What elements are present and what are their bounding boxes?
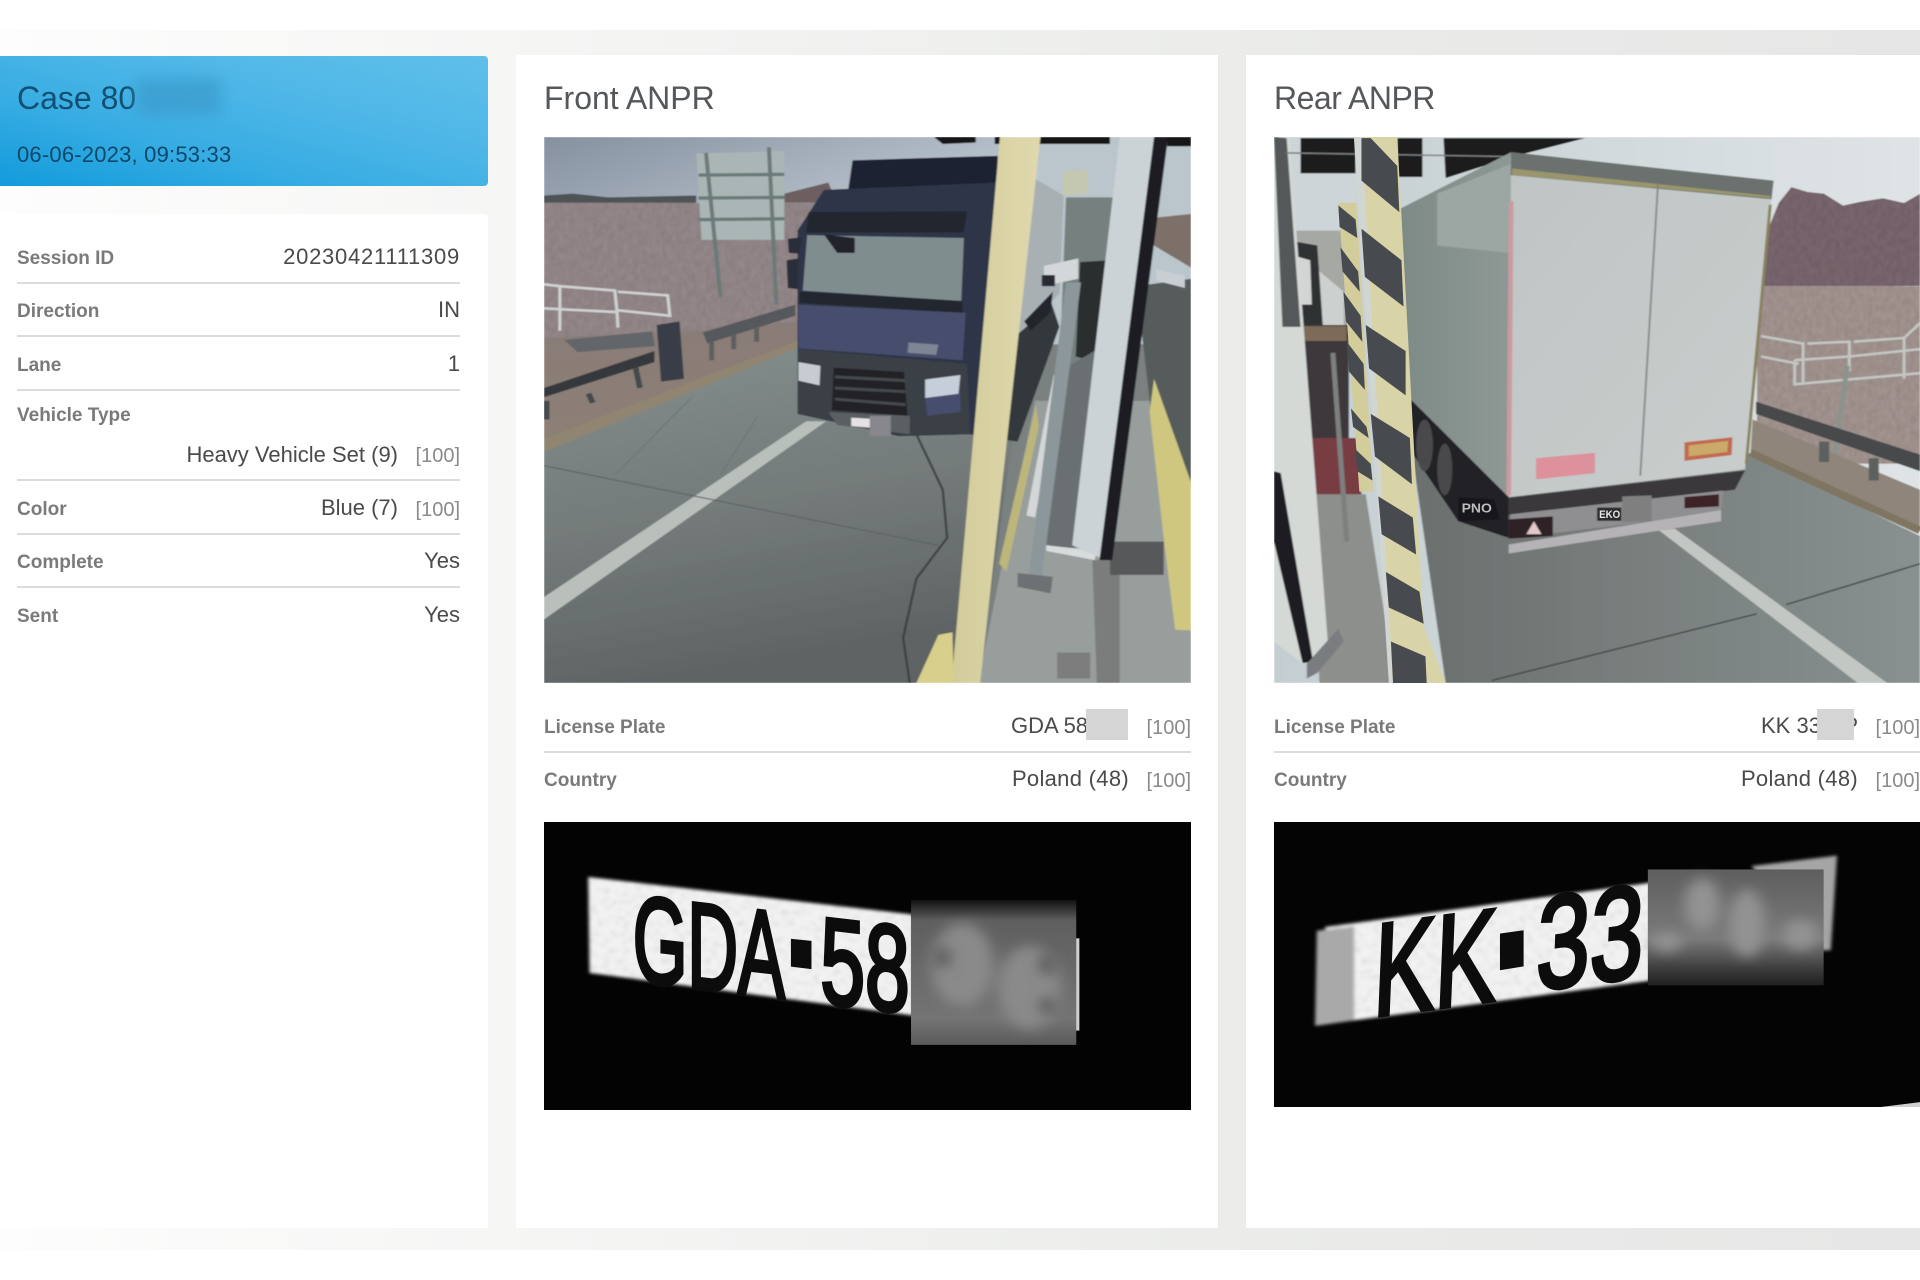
yellow pillar	[952, 137, 1040, 683]
row: vehicle type	[17, 389, 460, 481]
left background	[1286, 138, 1357, 234]
row: vehicle type: [100]	[416, 445, 460, 467]
white booth	[1026, 371, 1061, 518]
panel: case header	[0, 56, 488, 186]
image: front plate crop: 58	[820, 892, 910, 1039]
text on truck: PNO	[1462, 502, 1492, 516]
white column	[1072, 137, 1155, 558]
text on tail panel: EKO	[1599, 508, 1620, 521]
trailer rear face	[1509, 175, 1772, 497]
small striped pillar	[1338, 203, 1373, 492]
row: sent	[17, 602, 460, 627]
row: session id: 20230421111309	[283, 244, 460, 269]
row: front license plate: [100]	[1147, 717, 1191, 739]
gate interior	[1059, 197, 1114, 375]
row: rear license plate: P	[1843, 713, 1858, 738]
redacted case digits	[136, 78, 221, 116]
row: front license plate: GDA 58	[1011, 713, 1088, 738]
redaction: rear plate text	[1817, 709, 1854, 740]
yellow rails right	[1150, 379, 1191, 630]
heading: front ANPR: Front ANPR	[544, 80, 715, 116]
row: direction	[17, 285, 460, 337]
row: complete	[17, 536, 460, 588]
row: lane: 1	[448, 351, 460, 376]
row: vehicle type: Vehicle Type	[17, 405, 131, 426]
yellow rail left of booth	[999, 405, 1039, 571]
under-chassis	[1409, 397, 1509, 538]
tail section	[1509, 471, 1745, 515]
image: rear plate crop: KK	[1371, 880, 1500, 1045]
case number: Case 80	[17, 80, 136, 116]
overhead bars	[934, 137, 1191, 146]
row: rear country	[1274, 766, 1920, 792]
row: color	[17, 483, 460, 535]
row: rear country: Poland (48)	[1741, 766, 1858, 791]
row: session id: Session ID	[17, 248, 114, 269]
sign	[696, 151, 784, 240]
overhead panels	[1300, 138, 1585, 178]
row: color: [100]	[416, 499, 460, 521]
photo: truck front at toll gate	[544, 137, 1191, 683]
right side concrete	[978, 401, 1191, 683]
photo: truck rear at toll gate	[1274, 137, 1920, 683]
row: front country: [100]	[1147, 770, 1191, 792]
row: direction: Direction	[17, 301, 99, 322]
row: rear license plate: KK 33	[1761, 713, 1821, 738]
row: session id	[17, 232, 460, 284]
row: rear license plate	[1274, 701, 1920, 753]
trailer side	[1399, 152, 1511, 498]
road	[1412, 453, 1920, 683]
panel: rear ANPR	[1246, 55, 1920, 1228]
row: front license plate: License Plate	[544, 717, 665, 738]
field	[1757, 286, 1920, 464]
road markings	[544, 421, 826, 619]
row: lane: Lane	[17, 355, 61, 376]
row: front country: Country	[544, 770, 617, 791]
image: rear plate crop: 33	[1534, 856, 1647, 1018]
image: front plate crop: GDA	[633, 870, 785, 1025]
row: color: Blue (7)	[321, 495, 398, 520]
row: sent: Sent	[17, 606, 58, 627]
row: direction: IN	[438, 297, 460, 322]
truck	[848, 156, 998, 190]
row: vehicle type: Heavy Vehicle Set (9)	[186, 442, 398, 467]
row: complete: Yes	[424, 548, 460, 573]
panel: case details	[0, 214, 488, 1228]
main striped pillar	[1354, 137, 1446, 683]
image: front plate crop	[544, 822, 1191, 1110]
case date: 06-06-2023, 09:53:33	[17, 142, 231, 167]
row: rear license plate: License Plate	[1274, 717, 1395, 738]
row: rear license plate: [100]	[1876, 717, 1920, 739]
mud flap	[1458, 497, 1500, 521]
row: complete: Complete	[17, 552, 104, 573]
image: rear plate crop	[1274, 822, 1920, 1107]
trees	[1763, 187, 1920, 288]
railings	[544, 284, 670, 331]
panel: front ANPR	[516, 55, 1218, 1228]
row: lane	[17, 339, 460, 391]
row: front license plate	[544, 701, 1191, 753]
row: front country	[544, 766, 1191, 792]
row: rear country: Country	[1274, 770, 1347, 791]
redaction: front plate text	[1086, 709, 1128, 740]
row: front country: Poland (48)	[1012, 766, 1129, 791]
poles and camera	[1029, 282, 1081, 577]
left column	[1274, 137, 1329, 664]
row: color: Color	[17, 499, 67, 520]
row: sent: Yes	[424, 602, 460, 627]
railing	[1761, 323, 1920, 384]
row: rear country: [100]	[1876, 770, 1920, 792]
heading: rear ANPR: Rear ANPR	[1274, 80, 1435, 116]
ground and guard rail	[1751, 419, 1920, 527]
trailer behind truck	[1018, 179, 1064, 334]
